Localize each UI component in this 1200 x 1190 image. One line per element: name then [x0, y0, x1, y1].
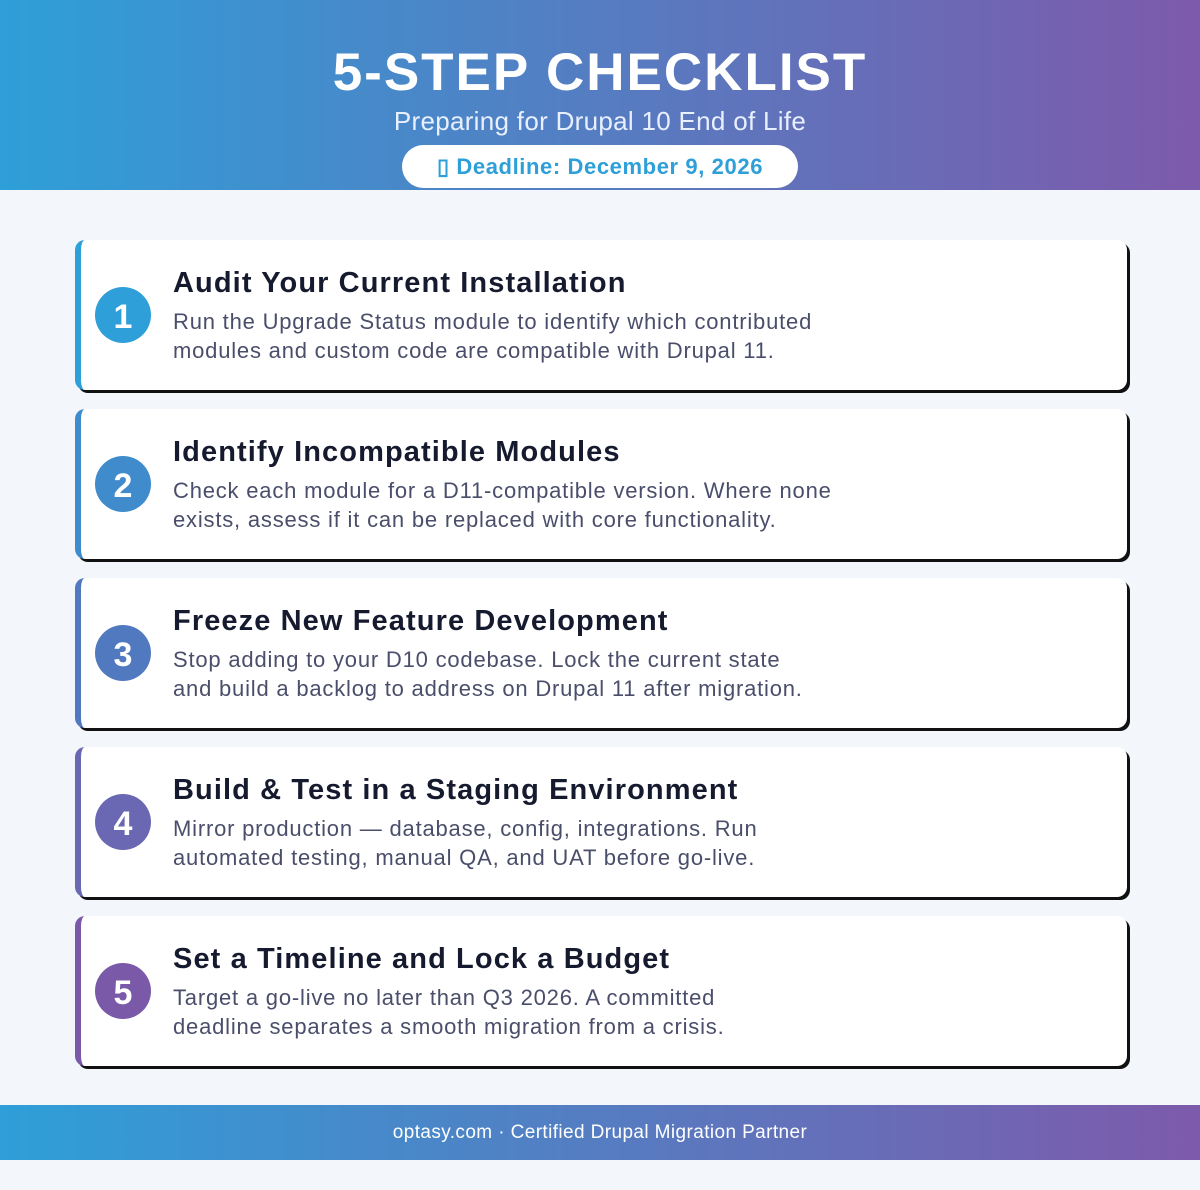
step number 4: 4	[114, 805, 132, 843]
deadline pill	[402, 145, 798, 188]
heading 3: Freeze New Feature Development	[173, 605, 669, 637]
step number 4	[95, 794, 151, 850]
text 1	[173, 309, 812, 363]
heading 1: Audit Your Current Installation	[173, 267, 627, 299]
text 4: automated testing, manual QA, and UAT before go-live.	[173, 845, 755, 870]
text 1: modules and custom code are compatible with Drupal 11.	[173, 338, 775, 363]
deadline pill: ▯ Deadline: December 9, 2026	[437, 154, 763, 179]
step number 1	[95, 287, 151, 343]
step number 3: 3	[114, 636, 132, 674]
header banner	[0, 0, 1200, 190]
text 5	[173, 985, 724, 1039]
card: step 3	[75, 578, 1127, 728]
footer	[0, 1105, 1200, 1160]
heading 4: Build & Test in a Staging Environment	[173, 774, 738, 806]
text 3: Stop adding to your D10 codebase. Lock the current state	[173, 647, 780, 672]
subtitle: Preparing for Drupal 10 End of Life	[394, 106, 806, 136]
text 2	[173, 478, 832, 532]
card: step 4	[75, 747, 1127, 897]
step number 5: 5	[114, 974, 132, 1012]
step number 2: 2	[114, 467, 132, 505]
text 3: and build a backlog to address on Drupal 11 after migration.	[173, 676, 803, 701]
step number 1: 1	[114, 298, 132, 336]
text 2: Check each module for a D11-compatible version. Where none	[173, 478, 832, 503]
card: step 5	[75, 916, 1127, 1066]
heading 2: Identify Incompatible Modules	[173, 436, 621, 468]
step number 2	[95, 456, 151, 512]
text 5: Target a go-live no later than Q3 2026. A committed	[173, 985, 715, 1010]
card: step 2	[75, 409, 1127, 559]
text 5: deadline separates a smooth migration from a crisis.	[173, 1014, 724, 1039]
text 4	[173, 816, 758, 870]
step number 5	[95, 963, 151, 1019]
text 2: exists, assess if it can be replaced with core functionality.	[173, 507, 777, 532]
text 3	[173, 647, 803, 701]
heading 5: Set a Timeline and Lock a Budget	[173, 943, 670, 975]
title: 5-STEP CHECKLIST	[333, 43, 867, 102]
card: step 1	[75, 240, 1127, 390]
text 1: Run the Upgrade Status module to identify which contributed	[173, 309, 812, 334]
text 4: Mirror production — database, config, integrations. Run	[173, 816, 758, 841]
footer: optasy.com · Certified Drupal Migration Partner	[393, 1122, 807, 1143]
step number 3	[95, 625, 151, 681]
